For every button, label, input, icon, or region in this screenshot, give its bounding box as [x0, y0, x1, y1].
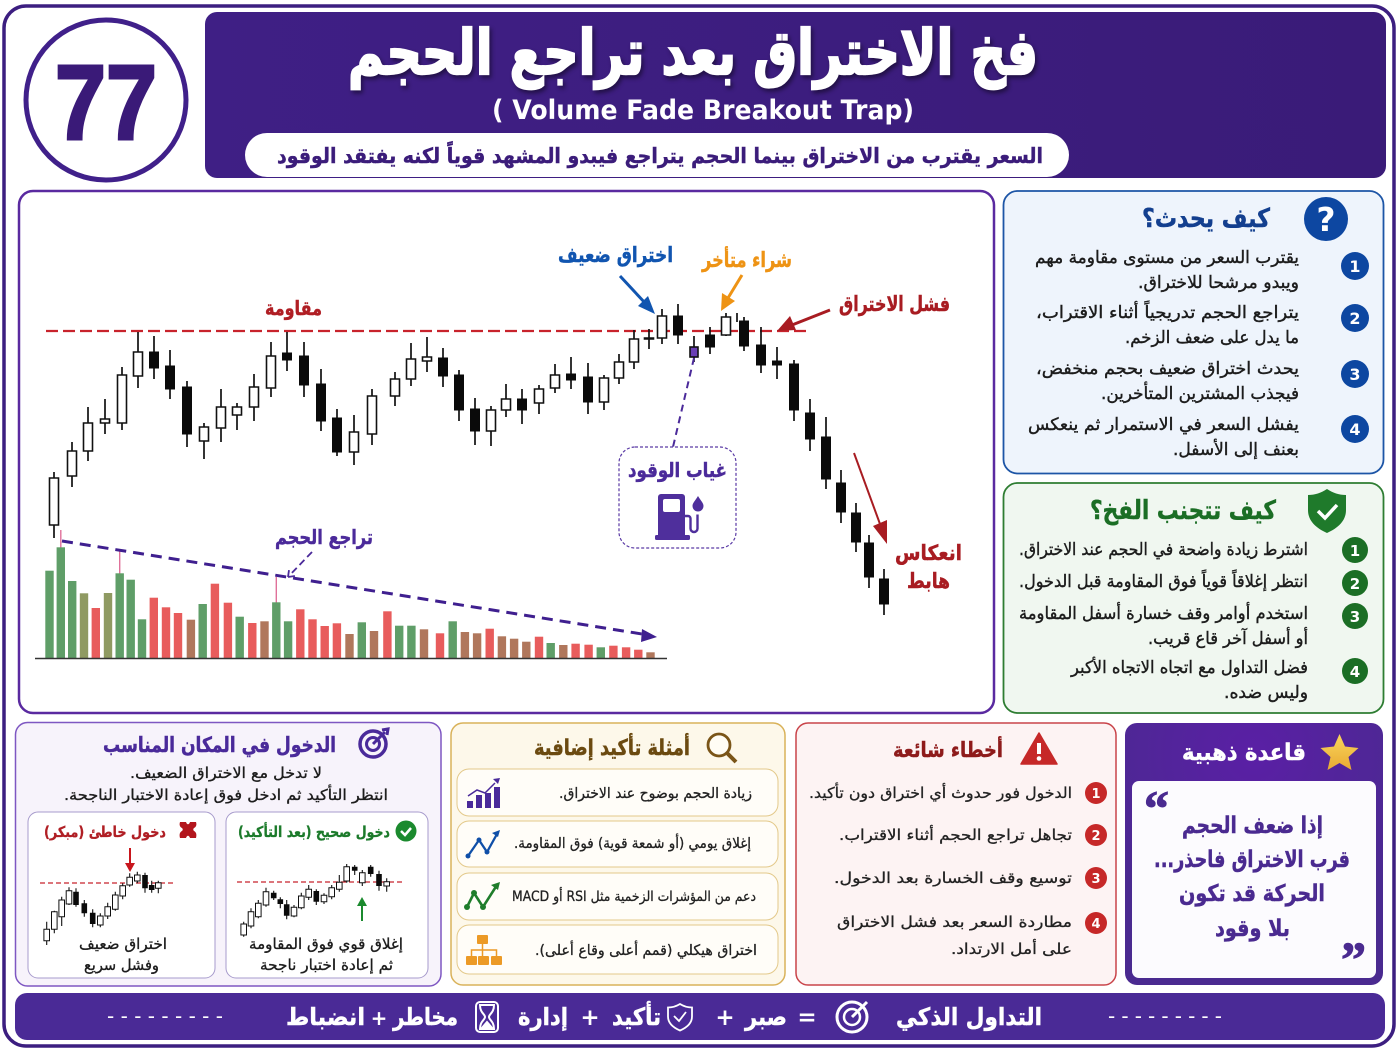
quote box: إذا ضعف الحجم	[1182, 813, 1323, 839]
step 4: بعنف إلى الأسفل.	[1173, 439, 1299, 460]
arrow: late buying	[721, 275, 742, 311]
mistake 2: تجاهل تراجع الحجم أثناء الاقتراب.	[839, 825, 1072, 844]
arrow: confirmation	[357, 897, 367, 921]
panel: price chart	[19, 191, 994, 713]
step 1: اشترط زيادة واضحة في الحجم عند الاختراق.	[1019, 540, 1308, 560]
candlesticks	[50, 304, 888, 615]
quote box	[1132, 780, 1376, 987]
icon: shield	[1308, 489, 1346, 533]
footer formula: +	[715, 1005, 735, 1031]
footer bar	[15, 993, 1385, 1040]
step 1: 1	[1349, 257, 1361, 276]
step 1: 1	[1350, 542, 1360, 560]
step 4: فضل التداول مع اتجاه الاتجاه الأكبر	[1070, 657, 1308, 678]
icon: question: ?	[1316, 200, 1336, 239]
step 3: يحدث اختراق ضعيف بحجم منخفض،	[1036, 359, 1299, 379]
step 2: 2	[1349, 309, 1361, 328]
heading: كيف يحدث؟	[1142, 204, 1271, 234]
label: weak breakout: اختراق ضعيف	[558, 243, 673, 267]
title: فخ الاختراق بعد تراجع الحجم	[348, 16, 1038, 89]
panel: golden rule	[1125, 723, 1383, 987]
footer dashes left: ---------	[107, 1004, 223, 1028]
icon: warning	[1021, 733, 1057, 764]
mistake 3: توسيع وقف الخسارة بعد الدخول.	[834, 869, 1072, 887]
icon: green trend	[464, 882, 500, 910]
icon: target	[837, 1002, 867, 1032]
icon: question	[1304, 197, 1348, 241]
header banner	[205, 12, 1386, 178]
panel: more confirmation examples	[451, 723, 785, 985]
entry advice: انتظر التأكيد ثم ادخل فوق إعادة الاختبار الناجحة.	[64, 784, 388, 804]
footer formula: صبر	[744, 1003, 787, 1031]
icon: rising bars	[467, 778, 500, 808]
sub-panel: wrong entry: دخول خاطئ (مبكر)	[44, 823, 166, 841]
row: daily close: إغلاق يومي (أو شمعة قوية) فوق المقاومة.	[514, 833, 751, 852]
row: volume: زيادة الحجم بوضوح عند الاختراق.	[559, 786, 752, 802]
step 4: 4	[1350, 663, 1360, 681]
sub-panel: wrong entry: اختراق ضعيف	[79, 935, 167, 953]
icon: hourglass	[476, 1002, 498, 1032]
step 3: 3	[1349, 365, 1361, 384]
mistake 4	[837, 912, 1107, 958]
footer formula: انضباط	[286, 1003, 365, 1031]
step 4	[1028, 415, 1369, 460]
mistake 3	[834, 867, 1107, 889]
footer formula: =	[797, 1005, 817, 1031]
entry advice: لا تدخل مع الاختراق الضعيف.	[130, 764, 322, 782]
mini chart: wrong entry	[40, 848, 173, 945]
icon: target	[360, 729, 388, 757]
label: bearish reversal: انعكاس	[895, 541, 962, 565]
label: late buying: شراء متأخر	[701, 245, 792, 272]
connector: volume fade	[288, 552, 312, 577]
mistake 1	[809, 782, 1107, 804]
arrow: early entry	[125, 848, 135, 872]
sub-panel: correct entry: إغلاق قوي فوق المقاومة	[249, 935, 403, 954]
mistake 4: 4	[1091, 917, 1101, 932]
step 1: ويبدو مرشحا للاختراق.	[1138, 273, 1299, 293]
dashed connector: no fuel	[673, 358, 694, 447]
icon: magnifier	[708, 734, 736, 762]
sub-panel: wrong entry: وفشل سريع	[84, 956, 159, 974]
footer formula: +	[371, 1006, 387, 1030]
quote box: الحركة قد تكون	[1179, 881, 1325, 907]
step 3: استخدم أوامر وقف خسارة أسفل المقاومة	[1019, 602, 1308, 624]
icon: fuel pump	[655, 494, 704, 540]
number badge	[26, 20, 186, 180]
row: volume	[457, 769, 778, 816]
sub-panel: correct entry: ثم إعادة اختبار ناجحة	[260, 956, 393, 974]
panel: common mistakes	[796, 723, 1116, 985]
quote box: “	[1144, 780, 1169, 836]
label: bearish reversal	[895, 541, 962, 593]
mistake 2: 2	[1091, 829, 1101, 844]
row: daily close	[457, 821, 778, 867]
step 4: يفشل السعر في الاستمرار ثم ينعكس	[1028, 415, 1299, 435]
footer dashes right: ---------	[1108, 1004, 1222, 1028]
row: structure	[457, 925, 778, 974]
step 2	[1019, 568, 1368, 596]
icon: cross	[180, 822, 196, 838]
footer formula: تأكيد	[612, 1001, 661, 1031]
mistake 1: 1	[1091, 787, 1101, 802]
arrow: volume trend	[62, 541, 657, 642]
heading: أمثلة تأكيد إضافية	[534, 732, 690, 761]
step 2: ما يدل على ضعف الزخم.	[1125, 328, 1299, 348]
resistance line	[46, 330, 808, 332]
entry advice	[64, 764, 388, 804]
icon: shield check	[668, 1004, 692, 1030]
tagline pill: السعر يقترب من الاختراق بينما الحجم يتراجع فيبدو المشهد قوياً لكنه يفتقد الوقود	[277, 140, 1043, 168]
icon: blue trend	[466, 830, 500, 858]
step 2: انتظر إغلاقاً قوياً فوق المقاومة قبل الدخول.	[1019, 568, 1308, 592]
tagline pill	[245, 133, 1069, 177]
label: resistance: مقاومة	[265, 296, 322, 320]
panel: right place to enter	[16, 722, 441, 986]
step 4: 4	[1349, 420, 1361, 439]
mistake 2	[839, 824, 1107, 846]
step 3	[1019, 602, 1368, 649]
footer formula: مخاطر	[392, 1003, 458, 1031]
step 3: أو أسفل آخر قاع قريب.	[1148, 627, 1308, 649]
icon: check	[396, 820, 416, 842]
panel: how to avoid	[1004, 483, 1384, 713]
step 2: 2	[1350, 575, 1360, 593]
step 3	[1036, 359, 1369, 404]
heading: أخطاء شائعة	[893, 735, 1003, 762]
step 4: وليس ضده.	[1224, 683, 1308, 703]
sub-panel: correct entry: دخول صحيح (بعد التأكيد)	[238, 822, 390, 841]
step 1	[1035, 248, 1369, 293]
label: bearish reversal: هابط	[907, 569, 950, 593]
callout: no fuel: غياب الوقود	[628, 458, 727, 482]
step 1	[1019, 537, 1368, 563]
footer formula: +	[580, 1005, 600, 1031]
step 1: يقترب السعر من مستوى مقاومة مهم	[1035, 248, 1299, 268]
step 3: 3	[1350, 608, 1360, 626]
quote box: بلا وقود	[1215, 916, 1290, 942]
callout: no fuel	[619, 447, 736, 548]
footer formula: إدارة	[518, 1003, 568, 1031]
step 4	[1070, 657, 1368, 703]
row: momentum: دعم من المؤشرات الزخمية مثل RSI أو MACD	[512, 887, 756, 905]
icon: hierarchy	[466, 935, 502, 965]
mistake 4: على أمل الارتداد.	[951, 939, 1072, 958]
icon: star	[1320, 734, 1358, 770]
step 2: يتراجع الحجم تدريجياً أثناء الاقتراب،	[1036, 299, 1299, 323]
sub-panel: wrong entry	[28, 812, 215, 978]
footer formula: التداول الذكي	[896, 1003, 1042, 1031]
sub-panel: correct entry	[226, 812, 428, 978]
panel: how it happens	[1004, 191, 1384, 474]
step 2	[1036, 299, 1369, 348]
arrow: weak breakout	[620, 276, 655, 314]
quote box: ”	[1341, 931, 1366, 987]
footer formula	[286, 1001, 1042, 1032]
volume bars	[35, 530, 667, 658]
row: momentum	[457, 873, 778, 920]
mistake 4: مطاردة السعر بعد فشل الاختراق	[837, 913, 1072, 931]
step 3: فيجذب المشترين المتأخرين.	[1101, 381, 1299, 404]
mistake 1: الدخول فور حدوث أي اختراق دون تأكيد.	[809, 782, 1072, 803]
label: breakout failure: فشل الاختراق	[839, 292, 950, 316]
subtitle: ( Volume Fade Breakout Trap)	[492, 95, 914, 126]
number badge: 77	[55, 44, 157, 162]
heading: كيف تتجنب الفخ؟	[1090, 496, 1277, 526]
heading: الدخول في المكان المناسب	[103, 733, 336, 757]
label: volume fade: تراجع الحجم	[275, 525, 373, 549]
heading: قاعدة ذهبية	[1182, 740, 1306, 766]
mini chart: correct entry	[237, 864, 403, 937]
arrow: bearish reversal	[854, 453, 887, 544]
mistake 3: 3	[1091, 872, 1101, 887]
arrow: breakout failure	[777, 310, 830, 331]
row: structure: اختراق هيكلي (قمم أعلى وقاع أعلى).	[535, 940, 757, 959]
